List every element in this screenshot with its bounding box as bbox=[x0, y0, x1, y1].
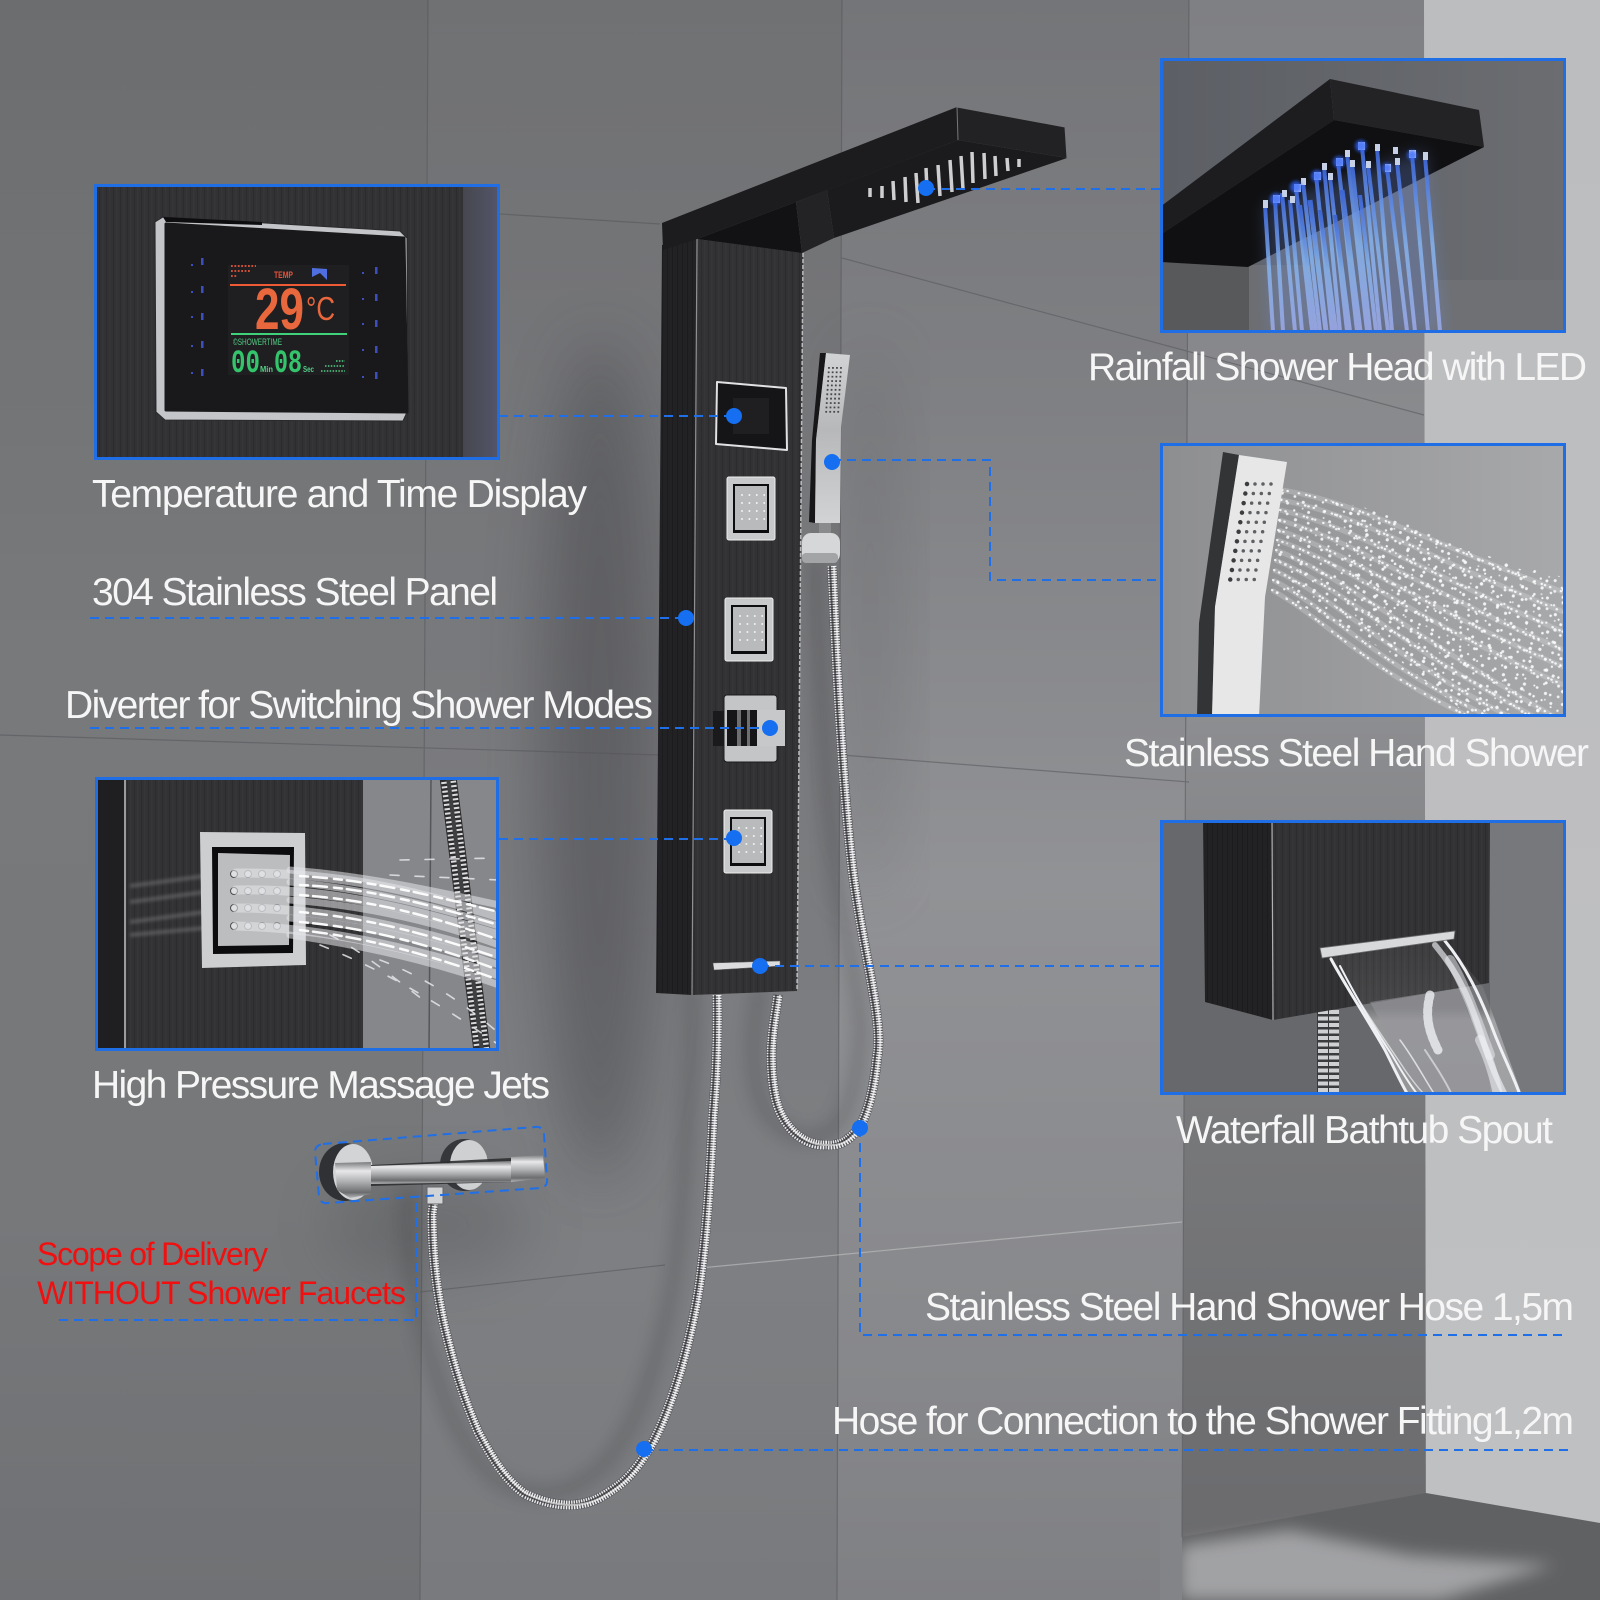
lcd screen: ©SHOWERTIME bbox=[233, 337, 282, 347]
label: temperature and time display: Temperature and Time Display bbox=[92, 473, 588, 516]
label: hand shower hose: Stainless Steel Hand Shower Hose 1,5m bbox=[925, 1286, 1574, 1329]
rain head bbox=[1160, 79, 1484, 267]
label: stainless steel panel: 304 Stainless Steel Panel bbox=[92, 571, 498, 614]
side hose bbox=[448, 777, 482, 1051]
label: waterfall spout: Waterfall Bathtub Spout bbox=[1176, 1109, 1553, 1152]
shower panel column bbox=[656, 107, 1067, 995]
rainfall head on the panel bbox=[662, 107, 1067, 253]
hand shower bbox=[802, 353, 850, 563]
waterfall spout on panel bbox=[713, 961, 780, 970]
lcd screen: °C bbox=[306, 290, 335, 327]
led nozzles bbox=[1263, 142, 1428, 208]
hand shower close-up bbox=[1197, 452, 1287, 717]
panel: temperature and time display bbox=[94, 184, 499, 459]
lcd screen: TEMP bbox=[274, 270, 293, 280]
soft hose shadows bbox=[407, 558, 860, 1493]
red note: without shower faucets: WITHOUT Shower Faucets bbox=[37, 1275, 406, 1311]
falling water bbox=[1330, 940, 1522, 1095]
display bezel bbox=[155, 217, 408, 421]
panel: stainless steel hand shower bbox=[1160, 443, 1566, 717]
lcd screen bbox=[228, 265, 349, 382]
blue rain streams bbox=[1265, 147, 1440, 331]
label: rainfall shower head: Rainfall Shower Head with LED bbox=[1088, 346, 1587, 389]
callout lines bbox=[54, 189, 1574, 1450]
panel bottom bbox=[1203, 820, 1490, 1020]
jet body bbox=[200, 832, 306, 968]
floor bbox=[1160, 1493, 1600, 1600]
water streams bbox=[236, 858, 499, 1045]
panel: high pressure massage jets bbox=[95, 777, 499, 1051]
label: massage jets: High Pressure Massage Jets bbox=[92, 1064, 550, 1107]
hose: hand shower hose bbox=[769, 566, 880, 1145]
spray drops bbox=[1272, 490, 1566, 717]
jet 3 bbox=[724, 810, 772, 873]
lcd screen: Sec bbox=[303, 365, 314, 374]
red note: scope of delivery: Scope of Delivery bbox=[37, 1236, 268, 1272]
lcd screen: Min bbox=[260, 365, 273, 374]
faucet bbox=[319, 1139, 545, 1204]
hose: connection to the fitting bbox=[430, 995, 719, 1505]
rain glow bbox=[1265, 150, 1445, 333]
hose below panel bbox=[1317, 1010, 1339, 1095]
diverter bbox=[713, 695, 785, 762]
lcd screen: 00 bbox=[231, 345, 260, 382]
label: connection hose: Hose for Connection to the Shower Fitting1,2m bbox=[832, 1400, 1574, 1443]
led glow bbox=[1270, 140, 1417, 205]
display on panel bbox=[716, 382, 787, 450]
lcd screen: 08 bbox=[274, 345, 302, 382]
jet 1 bbox=[727, 477, 775, 540]
faint spray reflection bbox=[130, 876, 205, 935]
panel: rainfall shower head with LED bbox=[1160, 58, 1566, 333]
label: hand shower: Stainless Steel Hand Shower bbox=[1124, 732, 1589, 775]
spout lip bbox=[1320, 931, 1455, 958]
jet 2 bbox=[725, 598, 773, 661]
touch leds bbox=[191, 258, 378, 379]
panel: waterfall bathtub spout bbox=[1160, 820, 1566, 1095]
label: diverter: Diverter for Switching Shower Modes bbox=[65, 684, 653, 727]
callout dots bbox=[636, 180, 934, 1457]
nozzles bbox=[870, 152, 1019, 203]
hand shower holder bbox=[802, 523, 840, 563]
lcd screen: 29 bbox=[255, 277, 304, 342]
